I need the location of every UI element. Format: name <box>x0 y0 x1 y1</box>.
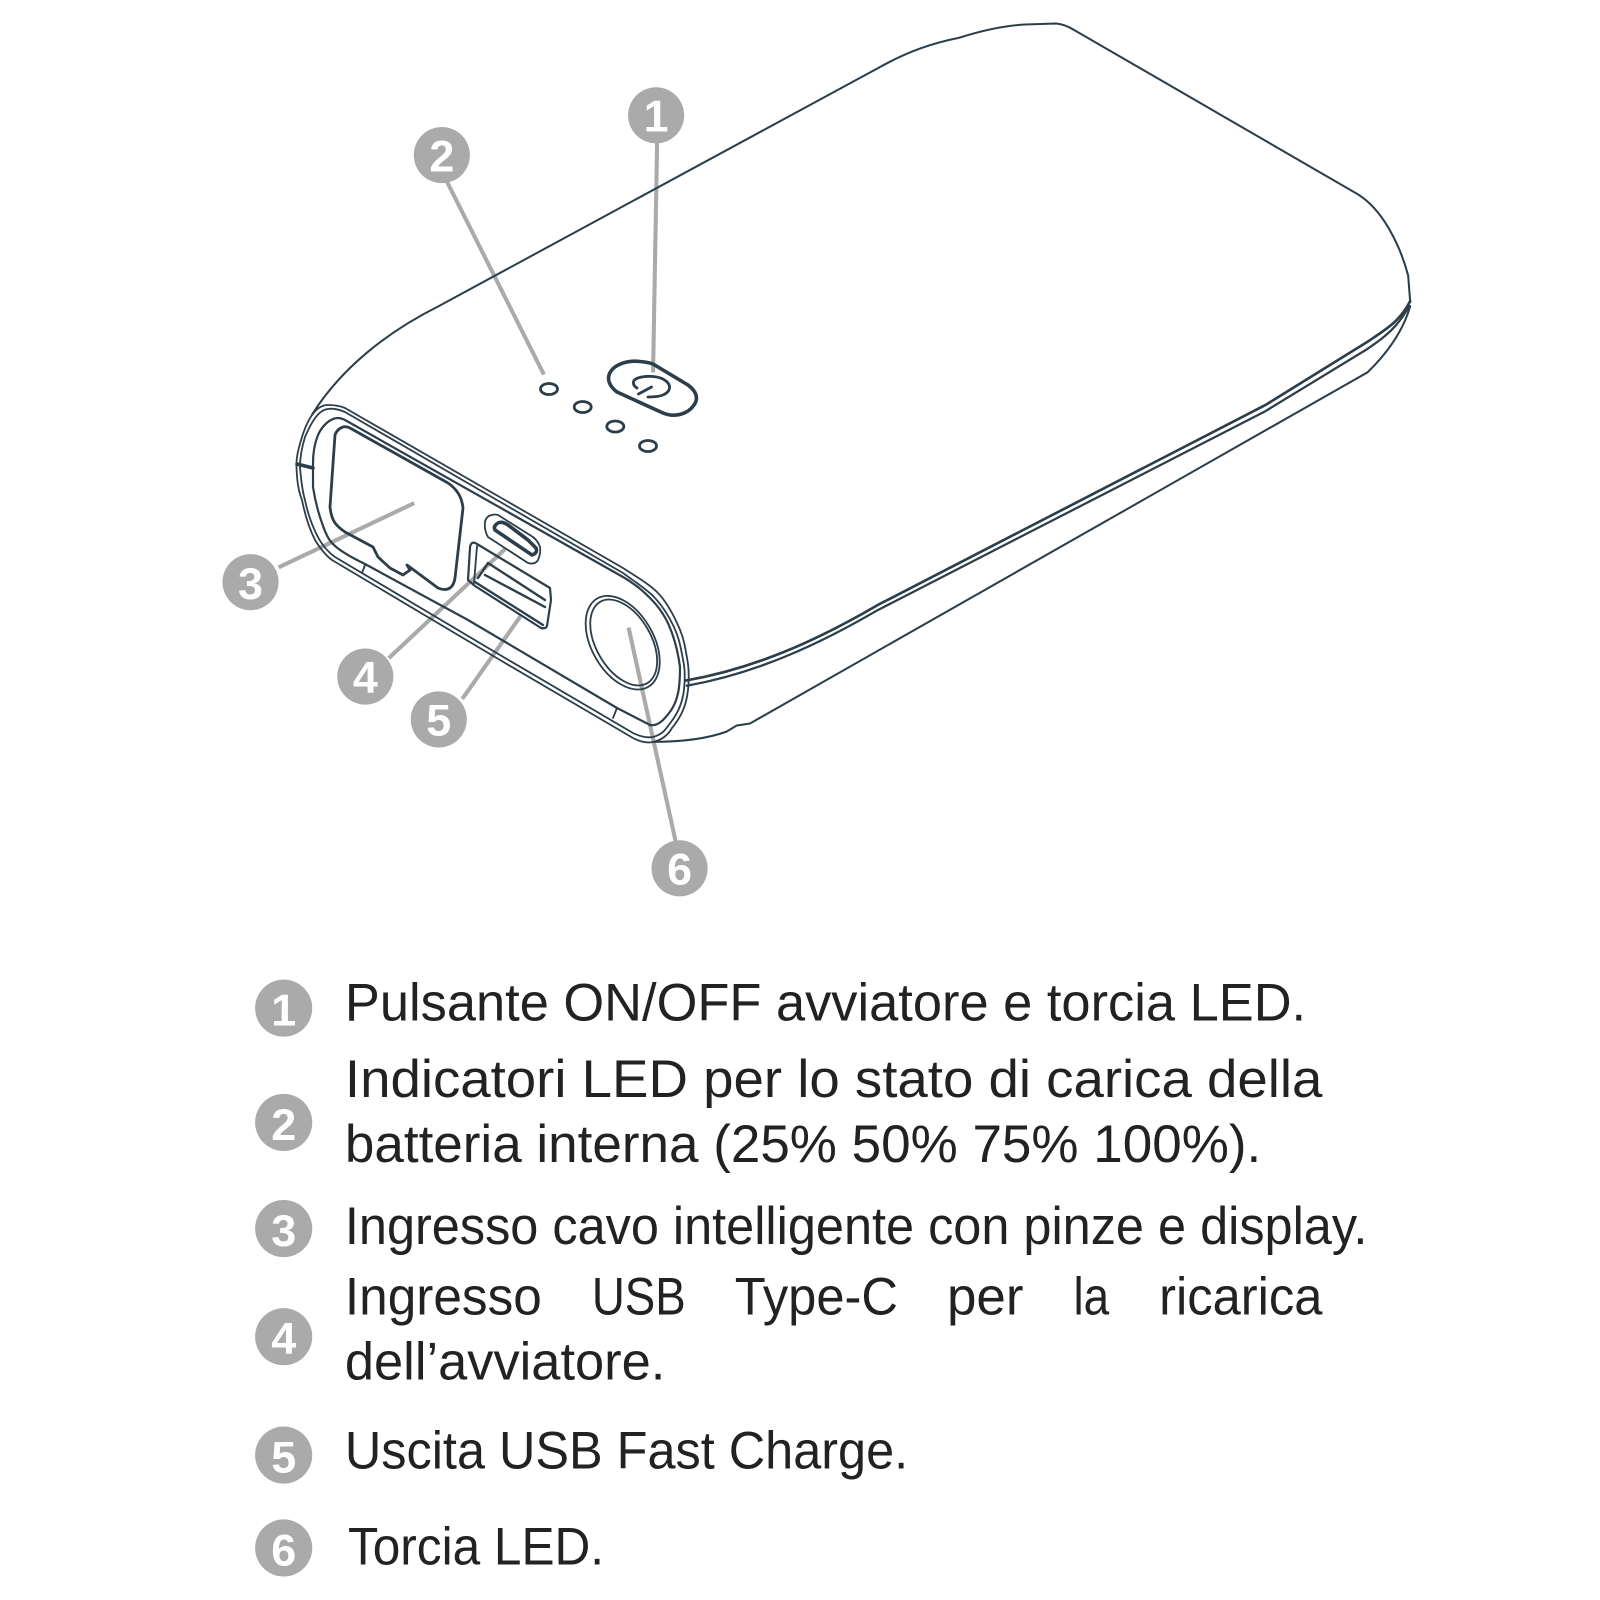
legend item 2: batteria interna (25% 50% 75% 100%). <box>345 1115 1261 1174</box>
callout line 4 <box>389 549 505 658</box>
legend item 5: Uscita USB Fast Charge. <box>345 1421 908 1480</box>
legend item 6 <box>255 1517 604 1577</box>
badge 2 <box>414 127 470 183</box>
badge 5 <box>411 691 467 747</box>
faceplate frame <box>296 405 689 743</box>
power button <box>609 361 696 415</box>
legend item 2 <box>255 1050 1323 1174</box>
legend item 1: Pulsante ON/OFF avviatore e torcia LED. <box>345 973 1306 1032</box>
legend item 4: USB <box>592 1267 686 1326</box>
legend item 2: 2 <box>271 1099 296 1150</box>
callout line 1 <box>653 141 657 372</box>
callout line 5 <box>462 616 520 699</box>
badge 6 <box>652 840 708 896</box>
legend item 2: Indicatori LED per lo stato di carica della <box>345 1050 1323 1109</box>
legend item 4: per <box>947 1267 1023 1326</box>
device illustration <box>296 23 1410 743</box>
legend <box>255 973 1367 1577</box>
legend item 4: Type-C <box>735 1267 898 1326</box>
callout line 2 <box>447 182 544 374</box>
badge 4: 4 <box>353 652 378 703</box>
callout line 3 <box>279 503 414 567</box>
badge 6: 6 <box>667 844 692 895</box>
badge 1: 1 <box>644 91 669 142</box>
legend item 3: Ingresso cavo intelligente con pinze e display. <box>345 1197 1367 1256</box>
USB Type-C port <box>485 514 540 564</box>
legend item 4: la <box>1073 1267 1110 1326</box>
device body outline <box>312 23 1410 742</box>
legend item 6: Torcia LED. <box>348 1517 604 1576</box>
USB-A port <box>468 543 551 628</box>
legend item 1: 1 <box>271 985 296 1036</box>
badge 4 <box>337 648 393 705</box>
front faceplate with ports <box>296 361 696 743</box>
LED torch lens <box>570 583 675 702</box>
legend item 4: dell’avviatore. <box>345 1333 665 1392</box>
legend item 4: ricarica <box>1159 1267 1323 1326</box>
badge 3 <box>222 554 279 610</box>
legend item 3: 3 <box>271 1205 296 1256</box>
badge 5: 5 <box>426 695 451 746</box>
badge 2: 2 <box>429 130 454 181</box>
legend item 6: 6 <box>271 1524 296 1575</box>
charge status LEDs <box>540 384 656 452</box>
badge 1 <box>628 87 684 143</box>
legend item 5: 5 <box>271 1431 296 1482</box>
legend item 4 <box>255 1267 1323 1392</box>
legend item 4: 4 <box>271 1313 296 1364</box>
callout line 6 <box>629 628 676 841</box>
cable input slot <box>330 427 463 590</box>
badge 3: 3 <box>238 558 263 609</box>
legend item 4: Ingresso <box>345 1267 542 1326</box>
